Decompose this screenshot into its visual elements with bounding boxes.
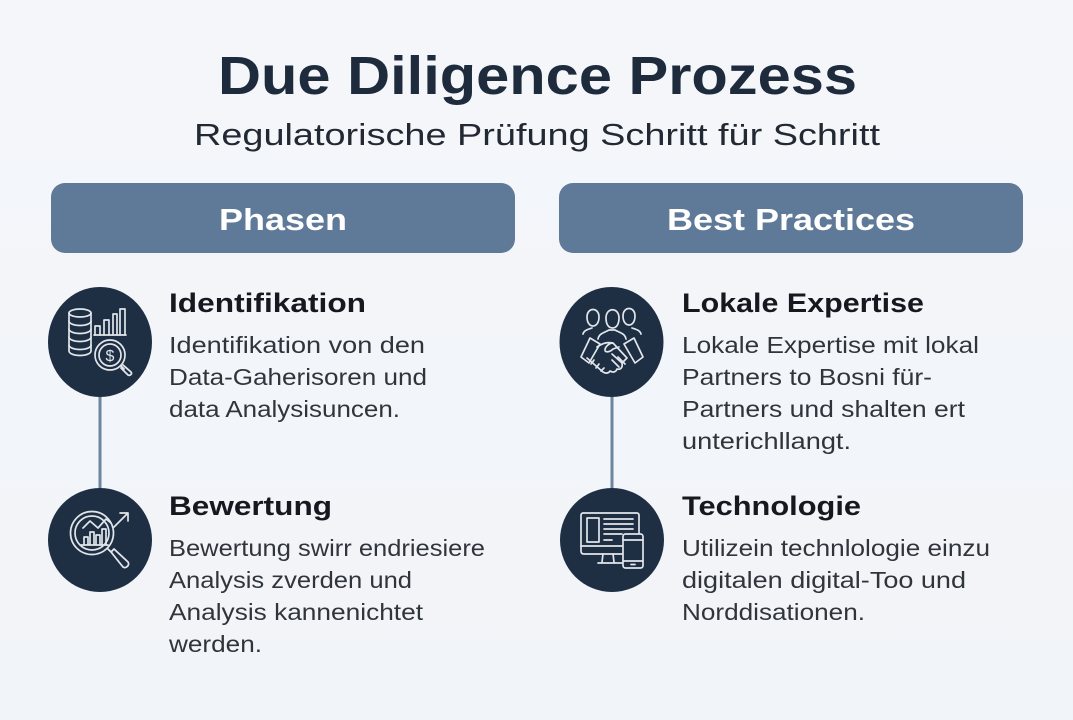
column header: Phasen: Phasen	[219, 202, 347, 237]
phase: Identifikation: Data-Gaherisoren und	[169, 364, 427, 390]
phase: Identifikation: Identifikation	[169, 288, 366, 318]
phase: Identifikation: Identifikation von den	[169, 332, 425, 358]
icon: data stack, bar chart and magnifier: $	[106, 348, 115, 365]
practice: Lokale Expertise: Lokale Expertise	[682, 288, 924, 318]
practice: Technologie: digitalen digital-Too und	[682, 567, 966, 593]
phase: Identifikation	[169, 288, 427, 422]
phase: Bewertung: werden.	[168, 631, 262, 657]
icon: magnifier with growth chart	[48, 488, 152, 592]
phase: Bewertung: Bewertung	[169, 491, 332, 521]
practice: Technologie: Utilizein technlologie einzu	[682, 535, 990, 561]
column header: Phasen	[51, 183, 515, 253]
column header: Best Practices	[559, 183, 1023, 253]
practice: Lokale Expertise: unterichllangt.	[682, 428, 851, 454]
phase: Bewertung: Analysis kannenichtet	[169, 599, 424, 625]
phase: Bewertung: Analysis zverden und	[169, 567, 412, 593]
title: Due Diligence Prozess	[218, 46, 857, 106]
panel: Best Practices column	[559, 183, 1023, 625]
practice: Technologie: Technologie	[682, 491, 861, 521]
panel: Phasen column	[48, 183, 515, 657]
icon: data stack, bar chart and magnifier	[48, 287, 152, 397]
timeline connector: Phasen	[98, 395, 102, 490]
practice: Technologie: Norddisationen.	[682, 599, 865, 625]
practice: Lokale Expertise: Partners und shalten ert	[682, 396, 966, 422]
practice: Lokale Expertise: Partners to Bosni für-	[682, 364, 932, 390]
practice: Technologie	[682, 491, 990, 625]
phase: Identifikation: data Analysisuncen.	[169, 396, 400, 422]
practice: Lokale Expertise: Lokale Expertise mit lokal	[682, 332, 979, 358]
phase: Bewertung: Bewertung swirr endriesiere	[169, 535, 485, 561]
icon: team and handshake	[560, 287, 664, 397]
phase: Bewertung	[168, 491, 485, 657]
practice: Lokale Expertise	[682, 288, 979, 454]
subtitle: Regulatorische Prüfung Schritt für Schritt	[194, 117, 880, 152]
icon: monitor and tablet	[560, 488, 664, 592]
column header: Best Practices: Best Practices	[667, 202, 915, 237]
timeline connector: Best Practices	[610, 395, 614, 490]
